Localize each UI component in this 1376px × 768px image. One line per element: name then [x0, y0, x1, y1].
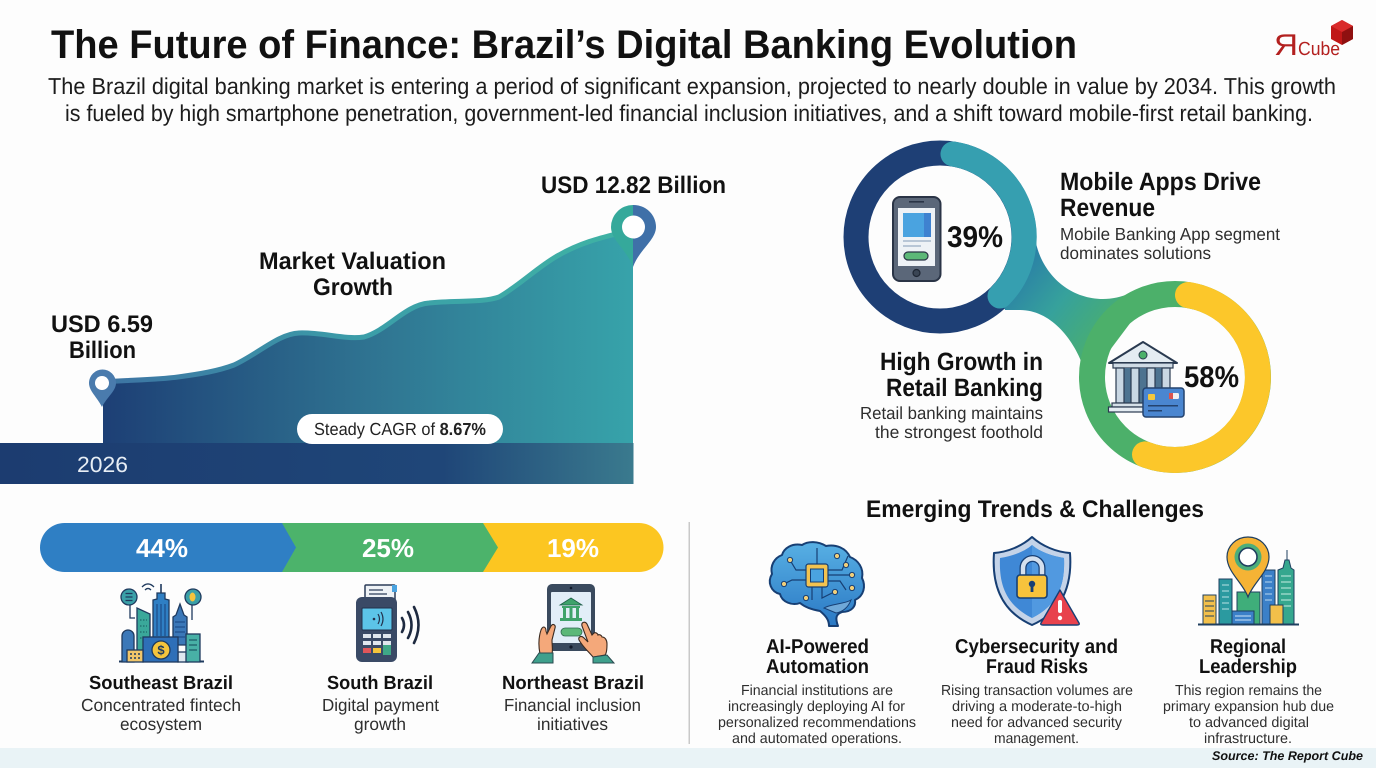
text: regional leadership: Regional [1210, 636, 1286, 658]
logo: RCube: Cube [1298, 39, 1340, 60]
icon: smartphone [893, 197, 940, 281]
text: cybersecurity and fraud risks: driving a moderate-to-high [952, 699, 1122, 715]
icon: payment terminal [356, 585, 418, 662]
ring connector [1000, 243, 1140, 370]
footer band [0, 748, 1376, 768]
text: AI-powered automation: and automated operations. [732, 731, 902, 747]
stat: 58%: 58% [1184, 361, 1239, 394]
text: mobile apps drive revenue [1060, 168, 1280, 263]
text: high growth in retail banking: High Growth in [880, 348, 1043, 376]
icon: regional city with pin [1198, 537, 1299, 624]
text: regional leadership: Leadership [1199, 656, 1297, 678]
start pin [89, 370, 116, 407]
regional share bar [40, 523, 664, 572]
ring: 39% navy base [856, 153, 1024, 321]
text: high growth in retail banking: the strongest foothold [875, 422, 1043, 442]
CAGR pill [297, 414, 503, 444]
chart: market valuation growth [0, 172, 726, 484]
linked donut rings [856, 153, 1258, 460]
logo: RCube [1274, 20, 1353, 62]
icon: fintech city: $ [157, 642, 165, 658]
chart heading: Growth [313, 274, 393, 301]
area under growth curve [103, 228, 633, 444]
text: northeast brazil: initiatives [537, 714, 608, 734]
text: high growth in retail banking [860, 348, 1043, 442]
icon: fintech city [119, 584, 204, 662]
text: cybersecurity and fraud risks: need for advanced security [951, 715, 1123, 731]
value label 2034: USD 12.82 Billion [541, 172, 726, 199]
text: regional leadership: primary expansion hub due [1163, 699, 1334, 715]
text: mobile apps drive revenue: dominates solutions [1060, 243, 1211, 263]
text: southeast brazil: Southeast Brazil [89, 673, 233, 694]
segment: yellow 19% [470, 523, 664, 572]
text: AI-powered automation: Automation [766, 656, 869, 678]
logo: RCube: Я [1274, 29, 1298, 62]
text: cybersecurity and fraud risks: Rising transaction volumes are [941, 683, 1133, 699]
text: AI-powered automation: AI-Powered [766, 636, 869, 658]
text: south brazil: South Brazil [327, 673, 433, 694]
intro text: The Brazil digital banking market is entering a period of significant expansion, projected to nearly double in value by 2034. This growth [48, 73, 1336, 99]
text: high growth in retail banking: Retail Banking [886, 374, 1043, 402]
text: south brazil: growth [354, 714, 406, 734]
text: regional leadership [1163, 636, 1334, 747]
text: northeast brazil: Financial inclusion [504, 695, 641, 715]
chart heading [259, 248, 446, 301]
text: mobile apps drive revenue: Revenue [1060, 194, 1155, 222]
text: mobile apps drive revenue: Mobile Banking App segment [1060, 224, 1280, 244]
text: southeast brazil: Concentrated fintech [81, 695, 241, 715]
chart heading: Market Valuation [259, 248, 446, 275]
text: regional leadership: infrastructure. [1204, 731, 1292, 747]
text: AI-powered automation: increasingly deploying AI for [728, 699, 905, 715]
icon: tablet with hands [532, 584, 614, 663]
intro text: is fueled by high smartphone penetration, government-led financial inclusion initiatives, and a shift toward mobile-first retail banking. [65, 100, 1313, 126]
text: AI-powered automation: Financial institutions are [741, 683, 893, 699]
end pin [611, 205, 656, 267]
timeline band [0, 443, 634, 484]
value label 2026: USD 6.59 [51, 311, 153, 338]
text: regional leadership: to advanced digital [1189, 715, 1309, 731]
text: high growth in retail banking: Retail banking maintains [860, 403, 1043, 423]
section divider [688, 522, 690, 744]
curve edge [103, 228, 633, 382]
title: The Future of Finance: Brazil’s Digital Banking Evolution [51, 23, 1077, 67]
text: southeast brazil [81, 673, 241, 734]
heading: emerging trends: Emerging Trends & Challenges [866, 496, 1204, 523]
intro text [48, 73, 1336, 126]
text: cybersecurity and fraud risks: Cybersecurity and [955, 636, 1118, 658]
segment: green 25% [270, 523, 498, 572]
text: cybersecurity and fraud risks [941, 636, 1133, 747]
segment: blue 44% [40, 523, 296, 572]
value label 2026 [51, 311, 153, 364]
text: northeast brazil [502, 673, 644, 734]
text: south brazil [322, 673, 439, 734]
text: regional leadership: This region remains the [1175, 683, 1322, 699]
value label 2026: Billion [69, 337, 136, 364]
text: southeast brazil: ecosystem [120, 714, 202, 734]
year label: 2026 [77, 452, 128, 477]
icon: security shield with warning [994, 537, 1079, 625]
text: AI-powered automation [718, 636, 916, 747]
ring: 39% teal arc [953, 154, 1024, 296]
ring: 58% green base [1092, 294, 1258, 460]
ring: 58% yellow arc [1145, 295, 1258, 460]
text: south brazil: Digital payment [322, 695, 439, 715]
label 19%: 19% [547, 533, 599, 563]
label 44%: 44% [136, 533, 188, 563]
stat: 39%: 39% [947, 221, 1003, 254]
icon: bank with card [1108, 342, 1184, 417]
label 25%: 25% [362, 533, 414, 563]
text: cybersecurity and fraud risks: Fraud Risks [986, 656, 1088, 678]
text: cybersecurity and fraud risks: management. [994, 731, 1079, 747]
text: AI-powered automation: personalized recommendations [718, 715, 916, 731]
source note: Source: The Report Cube [1212, 749, 1363, 763]
icon: AI brain [770, 542, 864, 626]
text: mobile apps drive revenue: Mobile Apps Drive [1060, 168, 1261, 196]
CAGR pill: Steady CAGR of 8.67% [314, 419, 486, 439]
text: northeast brazil: Northeast Brazil [502, 673, 644, 694]
